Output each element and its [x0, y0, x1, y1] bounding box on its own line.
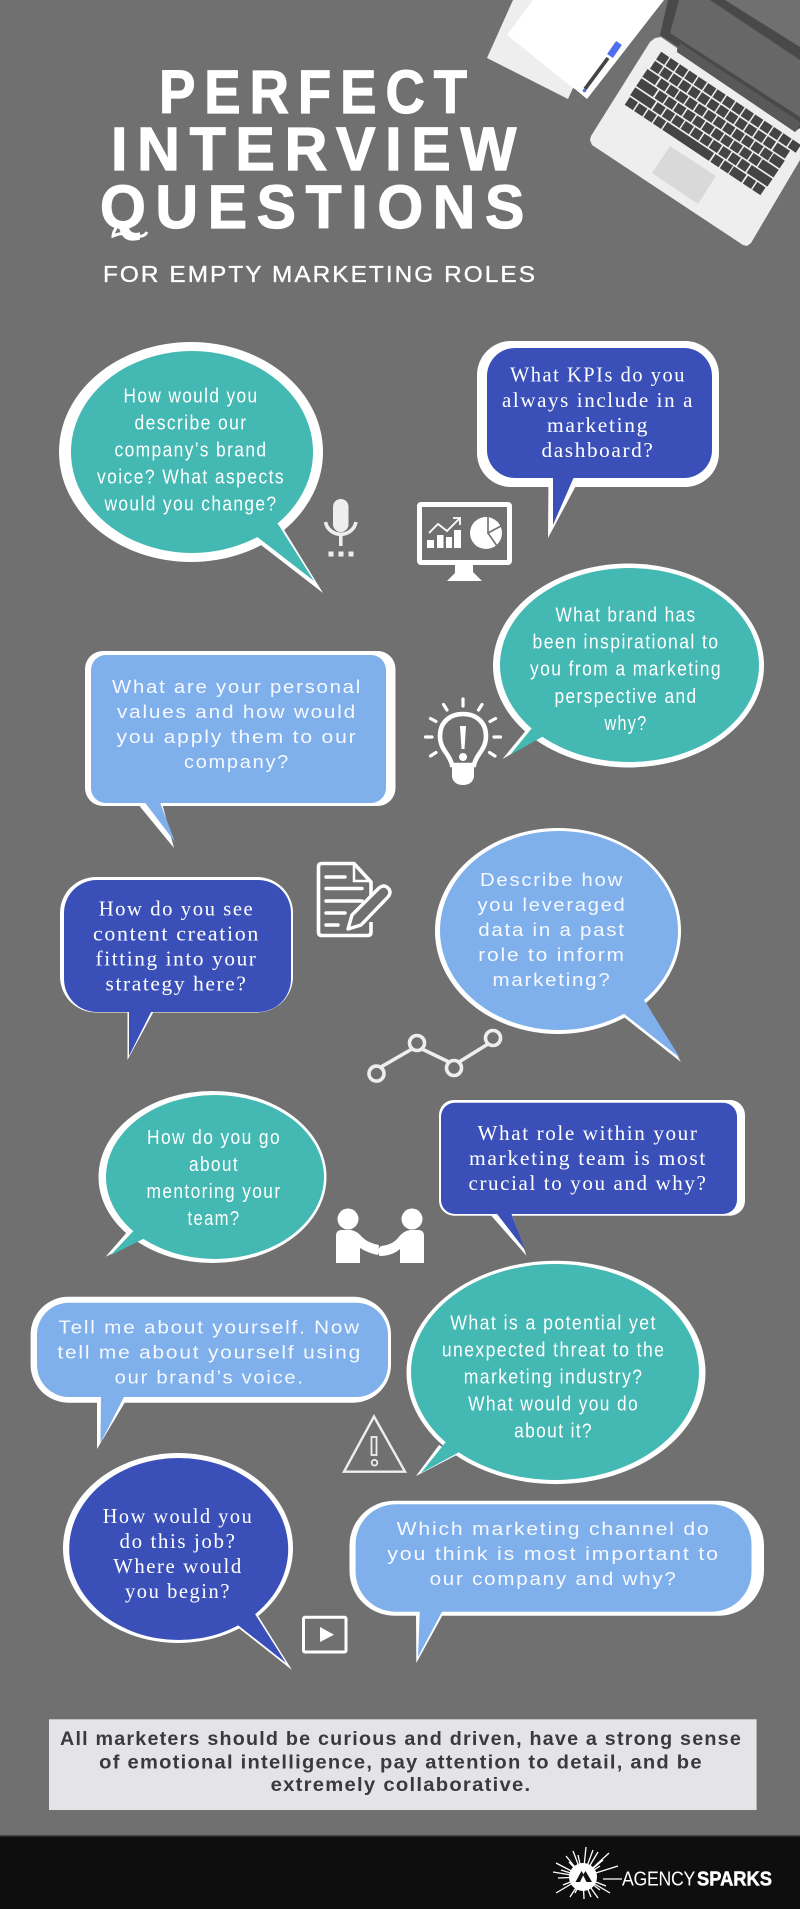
question text: voice? What aspects	[97, 466, 285, 488]
question text	[57, 1316, 362, 1387]
question text: role to inform	[478, 944, 626, 965]
speech bubble: inspirational brand	[493, 564, 764, 768]
icon: microphone	[326, 499, 356, 556]
question text	[468, 1121, 708, 1195]
question text: tell me about yourself using	[57, 1341, 362, 1362]
logo wordmark: AGENCY	[622, 1869, 695, 1891]
question text	[146, 1127, 282, 1230]
question text: values and how would	[117, 701, 357, 722]
icon: monitor with charts	[420, 504, 510, 581]
closing note text: All marketers should be curious and driven, have a strong sense	[60, 1728, 742, 1750]
question text: strategy here?	[106, 971, 248, 995]
closing note text: extremely collaborative.	[271, 1774, 531, 1796]
question text: How would you	[124, 386, 258, 408]
question text: What role within your	[478, 1121, 698, 1145]
icon: line chart	[369, 1030, 500, 1081]
question text: How do you go	[147, 1127, 281, 1149]
question text: you think is most important to	[387, 1543, 720, 1564]
question text: What KPIs do you	[510, 362, 686, 386]
speech bubble: content creation	[60, 877, 293, 1060]
question text	[530, 604, 722, 735]
question text: marketing?	[492, 969, 612, 990]
question text: What are your personal	[112, 676, 362, 697]
question text: do this job?	[120, 1529, 236, 1553]
question text: our company and why?	[430, 1568, 678, 1589]
question text: What would you do	[468, 1394, 639, 1416]
question text	[387, 1518, 720, 1589]
speech bubble: tell me about yourself	[31, 1297, 391, 1449]
question text: marketing team is most	[469, 1146, 707, 1170]
question text: How would you	[103, 1504, 253, 1528]
closing note text	[60, 1728, 742, 1796]
logo: Agency Sparks	[553, 1847, 772, 1899]
question text: would you change?	[104, 494, 278, 516]
logo wordmark	[622, 1869, 772, 1891]
question text: Where would	[113, 1554, 243, 1578]
question text: why?	[604, 713, 648, 735]
icon: document and pencil	[318, 864, 390, 936]
question text: Which marketing channel do	[397, 1518, 710, 1539]
question text: unexpected threat to the	[442, 1339, 665, 1361]
speech bubble: KPIs	[477, 341, 719, 538]
title: PERFECT	[159, 58, 476, 126]
question text: our brand’s voice.	[115, 1366, 305, 1387]
question text	[478, 869, 626, 990]
icon: handshake	[336, 1208, 424, 1263]
icon: laptop	[590, 0, 800, 246]
logo wordmark: SPARKS	[697, 1869, 772, 1891]
question text	[103, 1504, 253, 1603]
closing note text: of emotional intelligence, pay attention to detail, and be	[99, 1751, 703, 1773]
closing note panel	[49, 1719, 757, 1810]
question text: about it?	[514, 1420, 593, 1442]
question text: always include in a	[502, 388, 694, 412]
question text: about	[189, 1154, 239, 1176]
question text	[112, 676, 362, 772]
question text: you apply them to our	[116, 726, 358, 747]
speech bubble: unexpected threat	[406, 1261, 706, 1484]
speech bubble: marketing channel	[350, 1501, 764, 1663]
question text: crucial to you and why?	[468, 1171, 708, 1195]
question text	[502, 362, 694, 462]
question text: data in a past	[478, 919, 626, 940]
title	[100, 58, 534, 241]
icon: papers and pen	[487, 0, 664, 99]
question text: Tell me about yourself. Now	[58, 1316, 361, 1337]
icon: video play	[304, 1617, 346, 1652]
question text: How do you see	[99, 896, 254, 920]
question text: Describe how	[480, 869, 624, 890]
question text: fitting into your	[96, 946, 258, 970]
question text: you leveraged	[478, 894, 626, 915]
speech bubble: data in a past role	[435, 828, 681, 1062]
question text: you from a marketing	[530, 659, 722, 681]
question text: content creation	[93, 921, 260, 945]
speech bubble: brand voice	[59, 342, 323, 593]
icon: warning triangle	[344, 1416, 405, 1472]
title: QUESTIONS	[100, 173, 534, 241]
question text: mentoring your	[146, 1181, 282, 1203]
question text: What brand has	[556, 604, 696, 626]
question text: team?	[188, 1208, 240, 1230]
subtitle: FOR EMPTY MARKETING ROLES	[103, 261, 537, 287]
question text	[442, 1312, 665, 1442]
speech bubble: crucial role	[439, 1100, 745, 1256]
question text: dashboard?	[542, 438, 654, 462]
question text: perspective and	[554, 686, 698, 708]
question text: been inspirational to	[532, 632, 720, 654]
question text	[93, 896, 260, 995]
speech bubble: mentoring	[98, 1091, 326, 1263]
question text: you begin?	[125, 1579, 231, 1603]
speech bubble: how would you do this job	[63, 1453, 293, 1670]
question text: What is a potential yet	[450, 1312, 657, 1334]
footer bar	[0, 1835, 800, 1909]
speech bubble: personal values	[85, 651, 396, 848]
question text: describe our	[134, 412, 248, 434]
title: INTERVIEW	[111, 115, 526, 183]
question text	[97, 386, 285, 516]
question text: marketing	[547, 413, 649, 437]
question text: company’s brand	[114, 440, 268, 462]
question text: marketing industry?	[464, 1366, 643, 1388]
icon: light bulb	[426, 699, 500, 785]
question text: company?	[184, 751, 290, 772]
